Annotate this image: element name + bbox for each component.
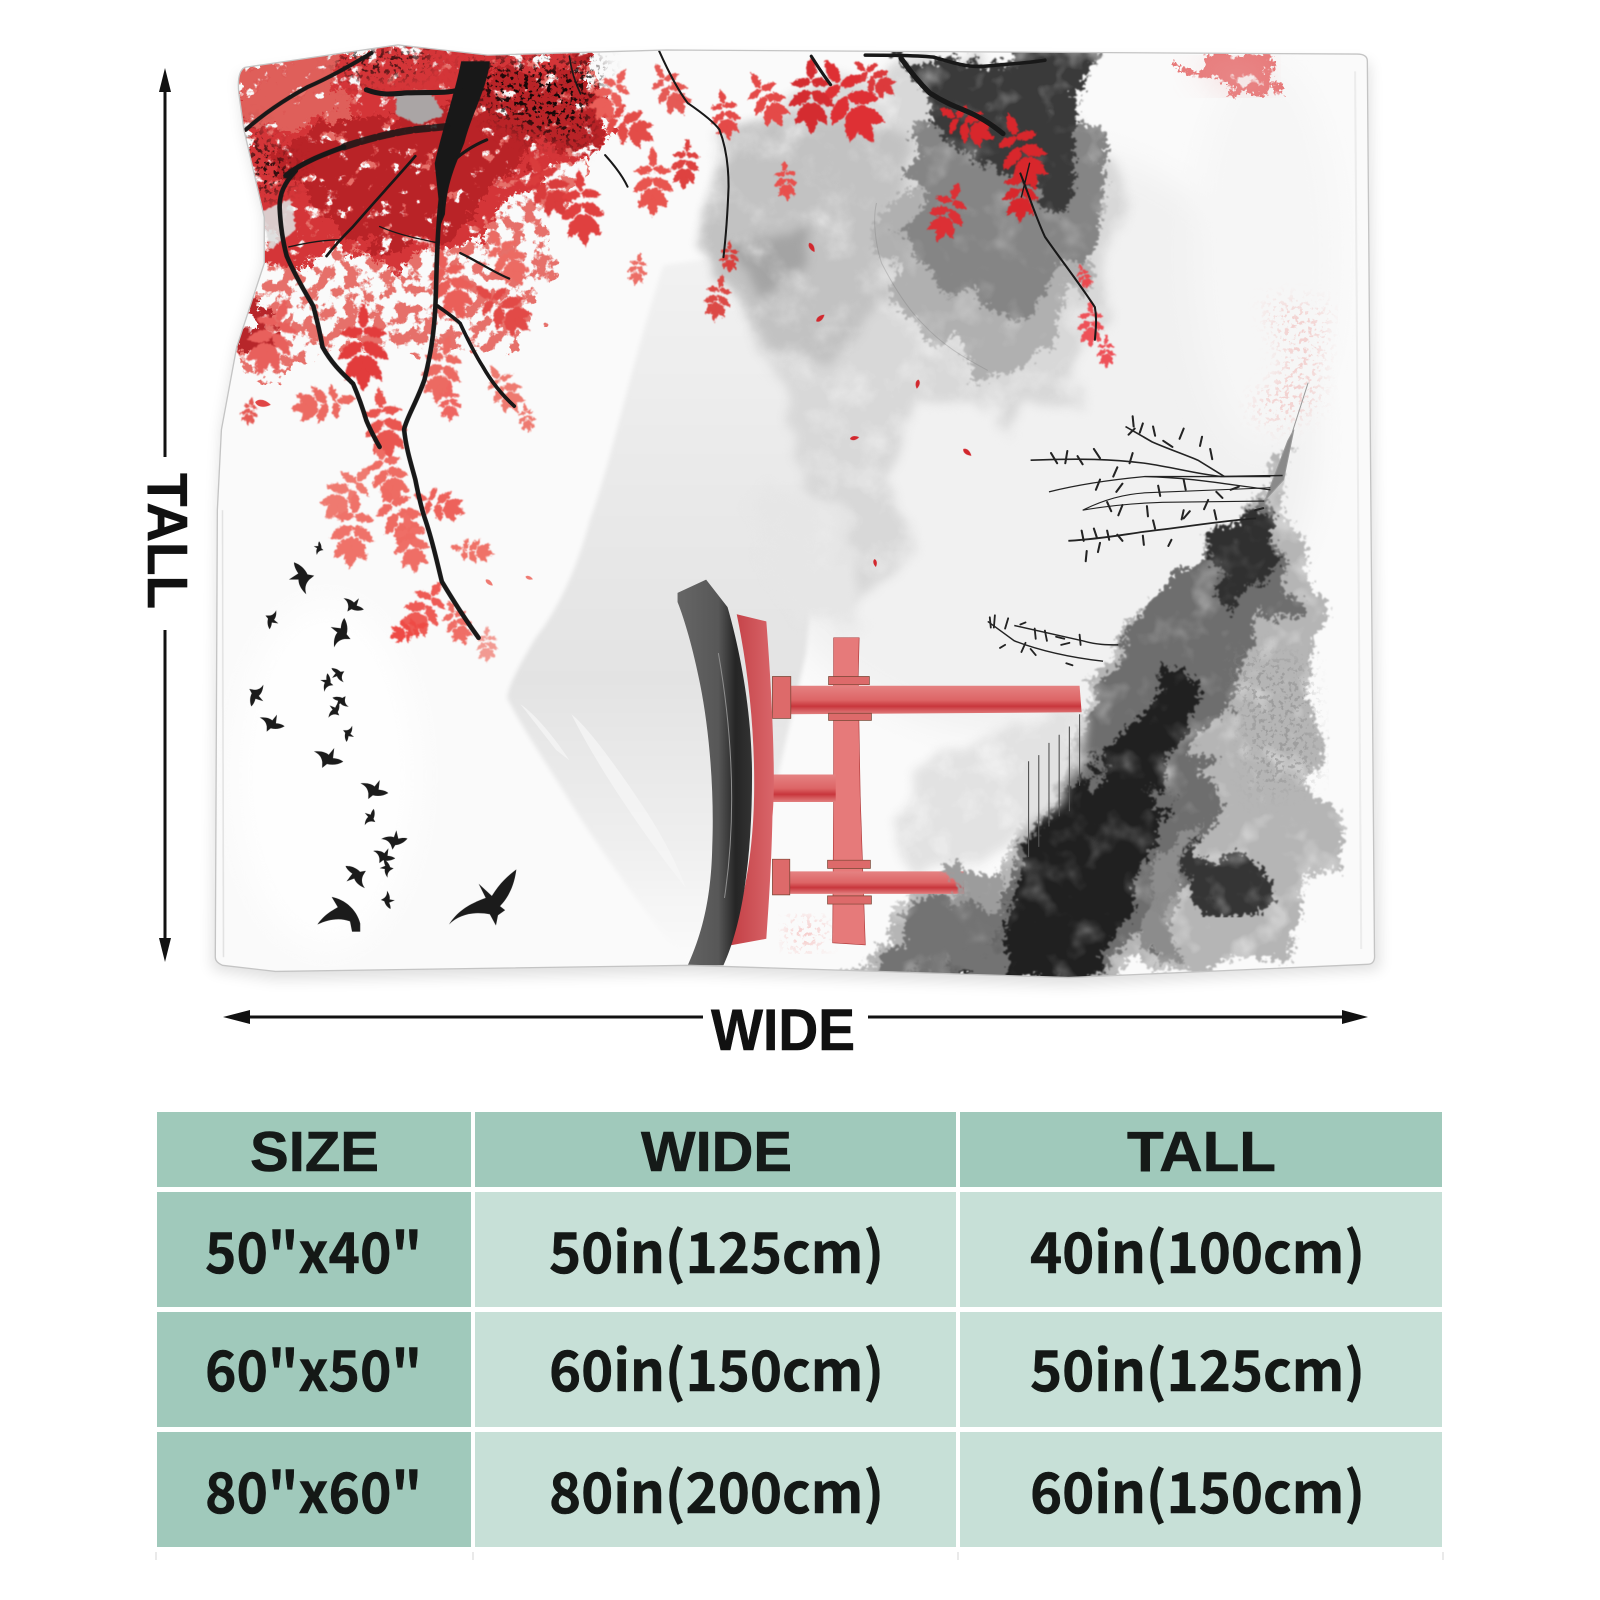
- torii gate: [678, 580, 1082, 965]
- splatter: [786, 918, 832, 949]
- row 60x50: 50in(125cm): [1030, 1327, 1365, 1408]
- large bird left: [317, 897, 360, 932]
- row 50x40: 50"x40": [205, 1209, 422, 1290]
- tall arrow: [159, 68, 171, 962]
- size table: [157, 1112, 1442, 1547]
- collars: [772, 677, 871, 904]
- flock of small birds: [245, 541, 516, 932]
- row 60x50: 60in(150cm): [549, 1327, 884, 1408]
- beam highlight: [718, 653, 732, 898]
- fuji snow highlights: [522, 705, 628, 784]
- grey mountains: [703, 56, 1122, 633]
- wide label: WIDE: [711, 998, 855, 1063]
- red band: [728, 614, 774, 946]
- left branch: [280, 170, 380, 447]
- blanket illustration: [212, 41, 1380, 986]
- cliff lines: [1029, 714, 1080, 857]
- upper diagonal: [246, 53, 371, 130]
- blanket outline: [215, 45, 1375, 978]
- table header row: TALL: [1127, 1120, 1276, 1184]
- large bird right: [449, 869, 516, 926]
- table header row: [157, 1112, 1442, 1187]
- canopy gaps: [396, 90, 445, 124]
- main trunk: [435, 61, 490, 224]
- tall label: TALL: [135, 473, 199, 609]
- blanket edge fold lines: [222, 71, 1361, 957]
- black speckle over canopy: [247, 51, 602, 204]
- black curved beam: [678, 580, 752, 965]
- hill tip: [1265, 383, 1308, 500]
- red petals: [255, 242, 973, 587]
- row 80x60: [157, 1432, 1442, 1547]
- table header row: SIZE: [250, 1120, 379, 1184]
- bamboo leaves: [1051, 416, 1263, 561]
- pale fuji mountain: [507, 264, 808, 872]
- middle pillar: [772, 774, 836, 802]
- row 80x60: 60in(150cm): [1030, 1449, 1365, 1530]
- wide arrow: [223, 1010, 1368, 1024]
- dark ink hill: [857, 459, 1327, 985]
- leaf clusters: main tree: [233, 54, 801, 663]
- blanket body: [215, 45, 1375, 978]
- lower pillar: [788, 871, 964, 894]
- row 80x60: 80"x60": [205, 1449, 422, 1530]
- table header row: WIDE: [641, 1120, 792, 1184]
- blanket shadow: [212, 53, 1380, 986]
- pale mist by hill: [896, 711, 1084, 865]
- mist wash: [235, 61, 1337, 949]
- red foliage base: [231, 41, 612, 372]
- leaf clusters: right branch: [786, 43, 1117, 368]
- pillar post: [833, 638, 865, 945]
- row 50x40: 50in(125cm): [549, 1209, 884, 1290]
- row 80x60: 80in(200cm): [549, 1449, 884, 1530]
- bamboo branches: [988, 416, 1283, 665]
- clipped artwork: [222, 41, 1361, 985]
- ink over lower pillar end: [944, 857, 995, 908]
- faint pink wash top right: [1176, 57, 1327, 429]
- row 60x50: [157, 1312, 1442, 1427]
- row 50x40: 40in(100cm): [1030, 1209, 1365, 1290]
- row 60x50: 60"x50": [205, 1327, 422, 1408]
- top pillar: [788, 686, 1082, 714]
- tree branches: [246, 51, 1096, 638]
- row 50x40: [157, 1192, 1442, 1307]
